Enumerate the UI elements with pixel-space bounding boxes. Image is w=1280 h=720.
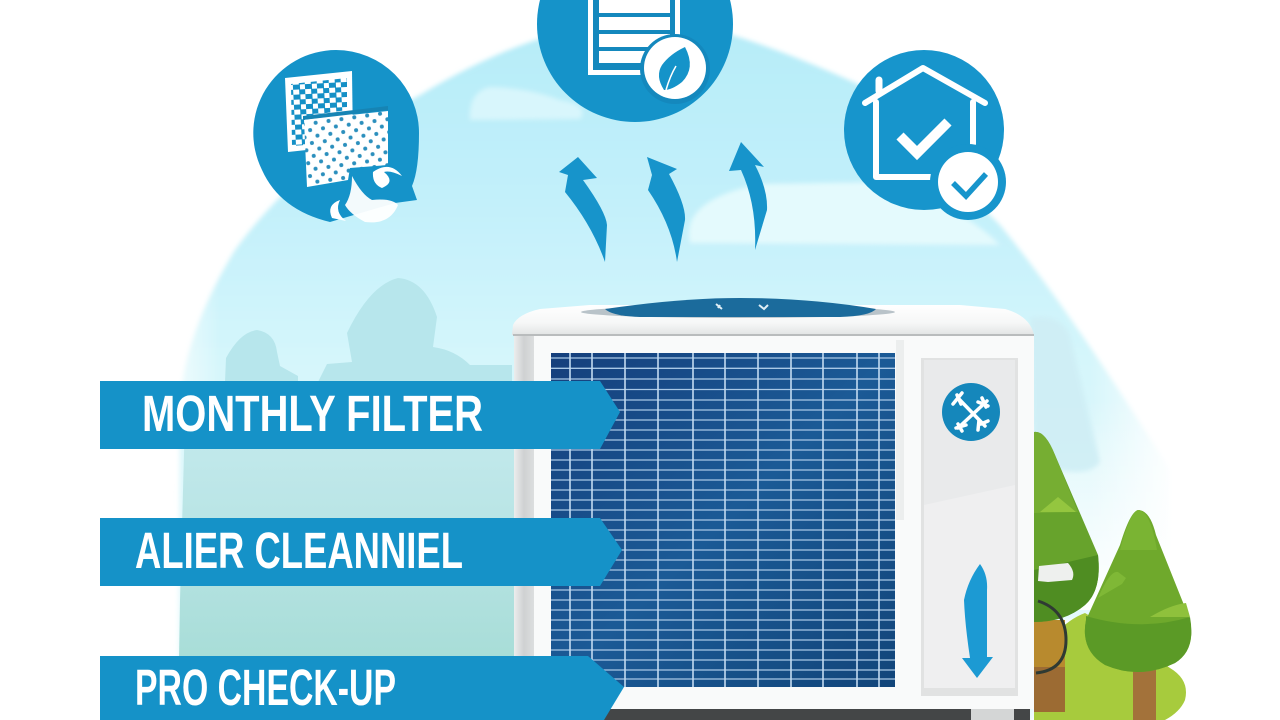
base — [604, 709, 1030, 720]
icon: home check circle — [844, 50, 1006, 220]
document with slats — [588, 0, 680, 75]
lower teal haze — [178, 381, 515, 720]
fan opening — [581, 298, 895, 318]
trees and bush — [1034, 432, 1191, 720]
filter panel back — [285, 71, 353, 152]
arrow 2 — [647, 157, 685, 262]
cable and tag — [1036, 563, 1073, 673]
ribbon: pro check-up — [100, 656, 624, 720]
side service panel — [921, 358, 1018, 696]
ribbon: pro check-up: PRO CHECK-UP — [135, 659, 396, 716]
arrows: airflow rising — [559, 142, 767, 262]
cleaning swirl — [330, 167, 402, 222]
bush — [1034, 613, 1186, 720]
icon: filter maintenance circle — [253, 50, 419, 222]
cloud bands — [470, 87, 1000, 245]
house checkmark — [900, 122, 948, 153]
ribbon: coil cleaning: ALIER CLEANNIEL — [135, 522, 463, 579]
check badge — [930, 144, 1006, 220]
leaf badge — [640, 34, 710, 104]
filter panel front — [303, 106, 388, 187]
background: pale blue dome — [150, 22, 1194, 720]
tree left — [1034, 432, 1099, 712]
silhouette: distant houses and trees — [225, 278, 512, 382]
ribbon: monthly filter: MONTHLY FILTER — [142, 385, 483, 442]
outdoor AC unit — [512, 298, 1034, 720]
icon: snowflake badge — [942, 383, 1000, 441]
arrow 1 — [559, 157, 607, 262]
cabinet — [514, 334, 1034, 709]
condenser coil grille — [551, 353, 895, 687]
arrow: vertical airflow on panel — [962, 564, 993, 678]
icon: clean filter document circle — [537, 0, 733, 122]
top lid — [512, 305, 1034, 336]
house outline — [865, 68, 985, 177]
arrow 3 — [729, 142, 767, 250]
tree right — [1085, 510, 1191, 720]
